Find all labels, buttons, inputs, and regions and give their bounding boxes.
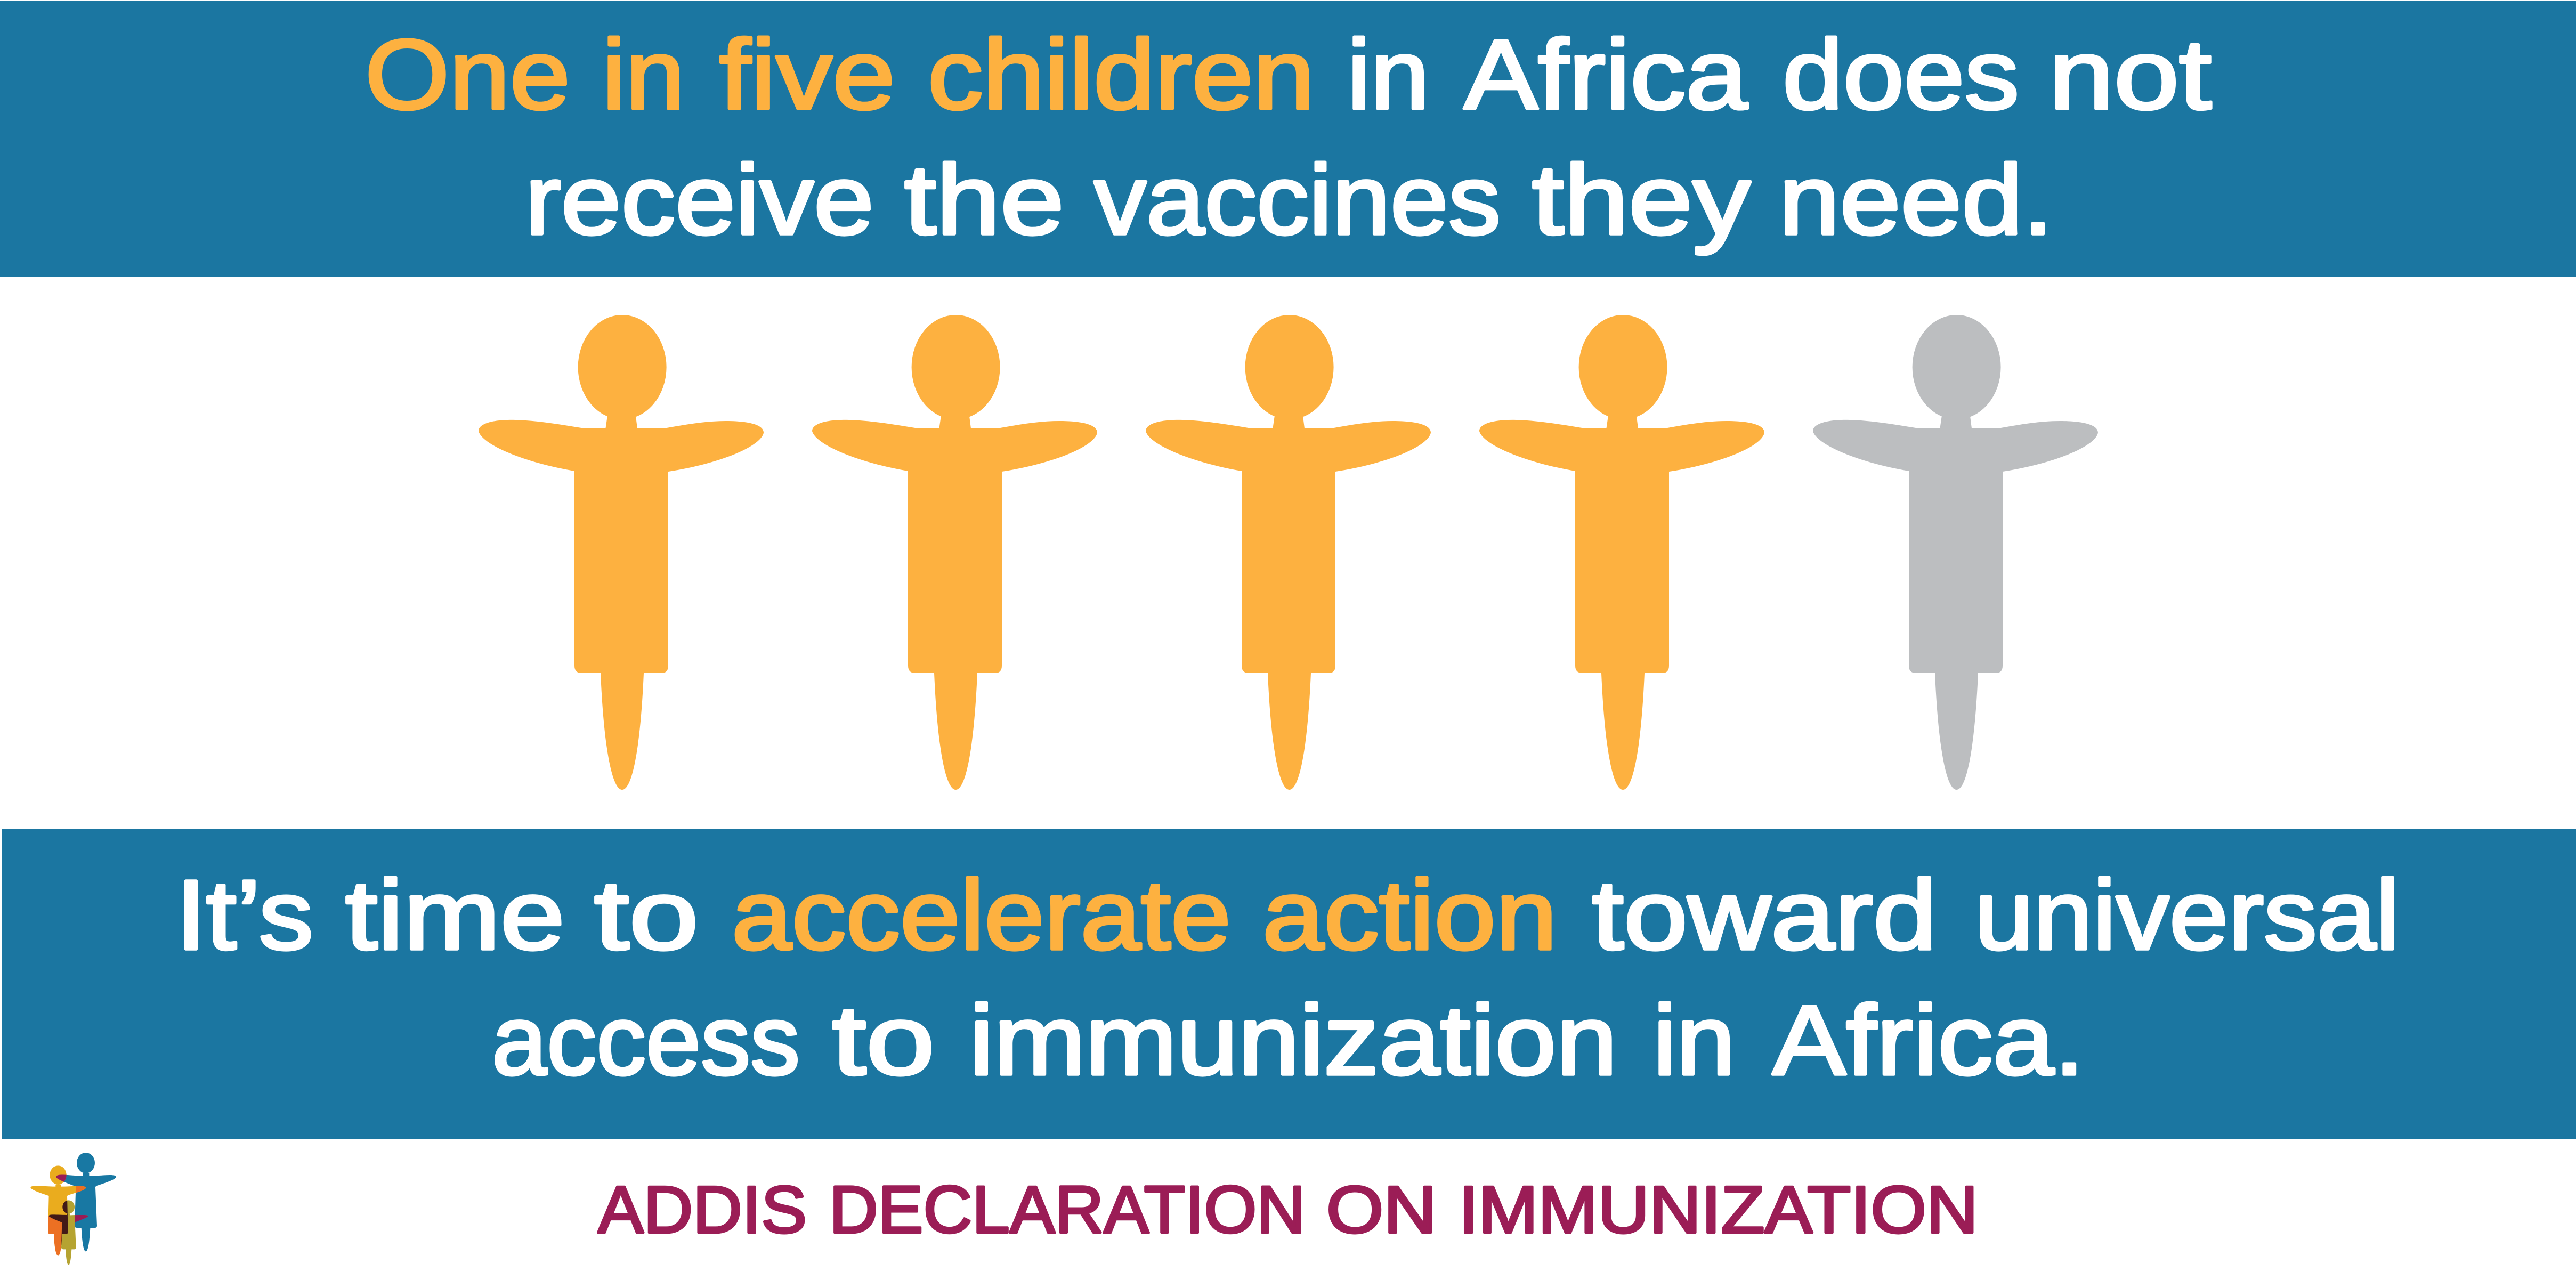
pictogram: four of five children vaccinated [479, 315, 2098, 790]
call to action line 2 [492, 985, 2085, 1096]
footer title: DECLARATION [829, 1173, 1306, 1247]
footer title: IMMUNIZATION [1459, 1173, 1978, 1247]
figure 3: orange [1146, 315, 1431, 790]
heading line 1: in [602, 20, 685, 130]
footer title: ON [1326, 1173, 1437, 1247]
heading line 1: children [928, 20, 1315, 130]
heading line 1: does [1783, 20, 2019, 130]
logo overlap: arm over head [56, 1174, 67, 1182]
logo overlap: child on yellow adult [49, 1200, 68, 1246]
heading line 2: need. [1779, 145, 2053, 255]
call to action line 1: It’s [176, 860, 313, 970]
heading line 1: five [719, 20, 895, 130]
figure 4: orange [1479, 315, 1764, 790]
top banner [0, 1, 2576, 277]
footer title [598, 1173, 1978, 1247]
call to action line 1: accelerate [732, 860, 1231, 970]
call to action line 2: immunization [969, 985, 1617, 1096]
logo figure: child [49, 1200, 88, 1265]
heading line 1: One [365, 20, 570, 130]
heading line 2: they [1532, 145, 1751, 255]
heading line 1: Africa [1464, 20, 1748, 130]
call to action line 1: toward [1592, 860, 1937, 970]
heading line 2: the [904, 145, 1064, 255]
call to action line 1: to [594, 860, 699, 970]
logo figure: yellow adult [30, 1165, 86, 1256]
figure 5: grey [1813, 315, 2098, 790]
heading line 1: not [2049, 20, 2212, 130]
call to action line 1: time [345, 860, 565, 970]
call to action line 2: Africa. [1772, 985, 2085, 1096]
heading line 2: vaccines [1094, 145, 1501, 255]
call to action line 2: access [492, 985, 800, 1096]
heading line 1: in [1347, 20, 1429, 130]
call to action line 1 [176, 860, 2400, 970]
figure 2: orange [812, 315, 1097, 790]
logo: three overlapping figures [28, 1151, 119, 1265]
figure 1: orange [479, 315, 764, 790]
call to action line 1: action [1262, 860, 1557, 970]
bottom banner [2, 829, 2576, 1139]
call to action line 2: to [832, 985, 935, 1096]
heading line 2 [525, 145, 2053, 255]
heading line 1 [365, 20, 2212, 130]
footer title: ADDIS [598, 1173, 807, 1247]
logo overlap: child arm on blue adult [75, 1215, 88, 1222]
logo figure: blue adult [64, 1153, 116, 1251]
call to action line 1: universal [1974, 860, 2400, 970]
heading line 2: receive [525, 145, 874, 255]
call to action line 2: in [1653, 985, 1735, 1096]
